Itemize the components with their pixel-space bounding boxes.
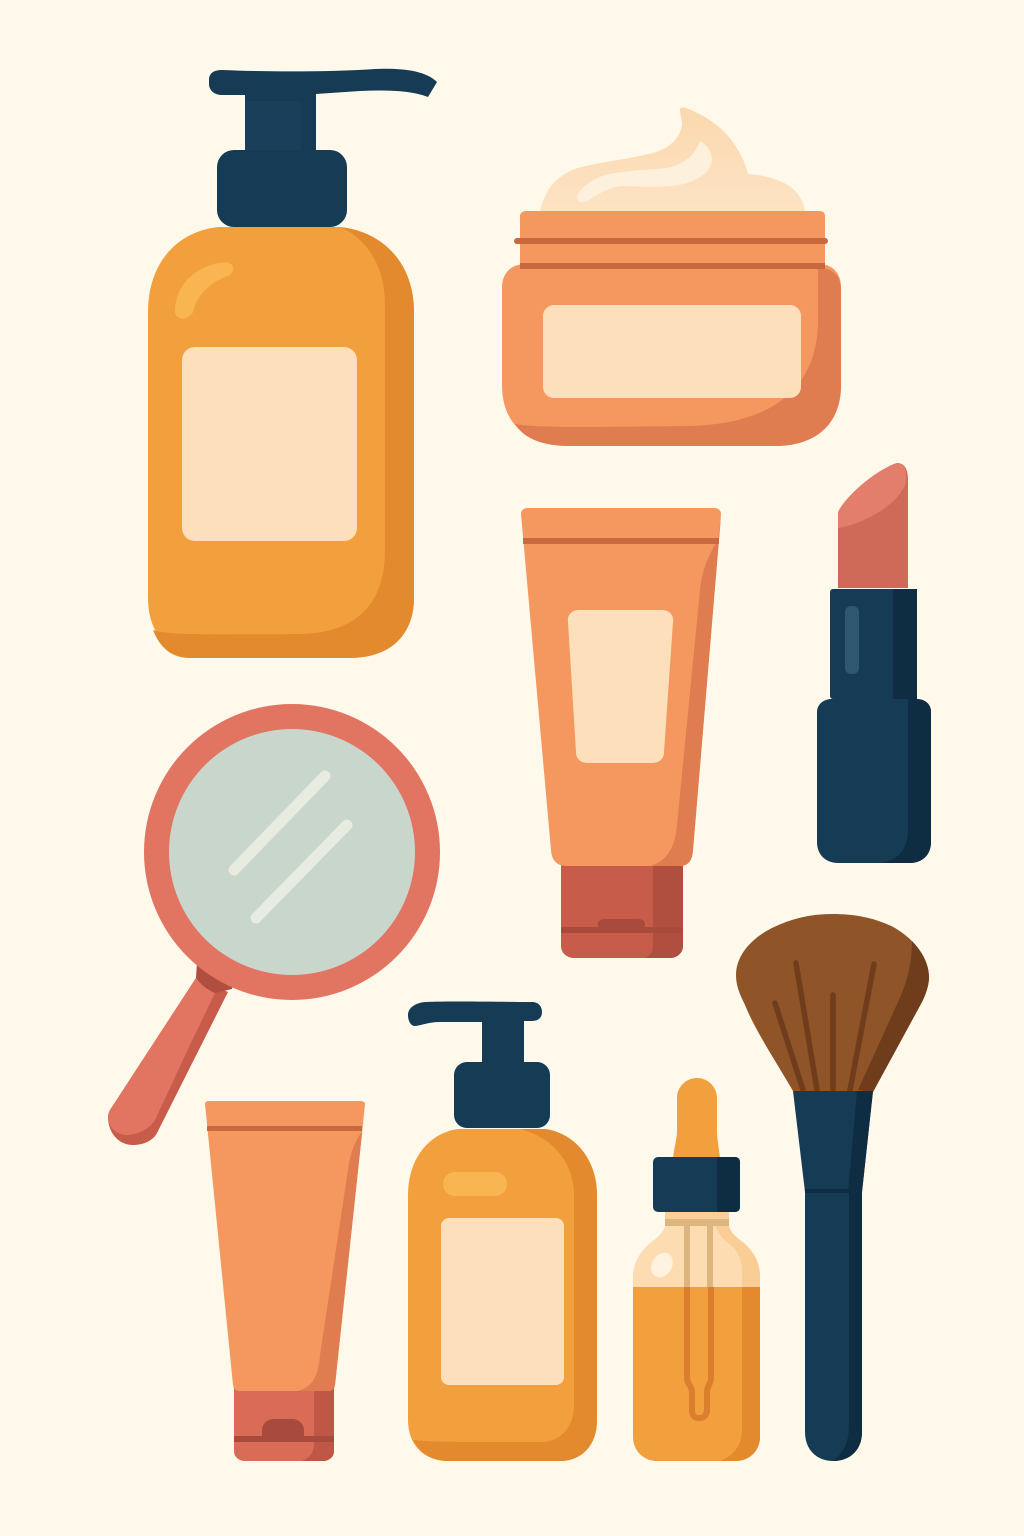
icon: cream jar	[502, 107, 841, 446]
icon: hand mirror	[108, 704, 440, 1145]
icon: large tube	[521, 508, 721, 958]
icon: dropper serum bottle	[633, 1078, 760, 1461]
icon: small tube	[205, 1101, 365, 1461]
icon: large pump bottle	[148, 69, 437, 658]
icon: small pump bottle	[408, 1002, 597, 1461]
icon: lipstick	[817, 463, 931, 863]
icon: makeup brush	[736, 914, 929, 1461]
